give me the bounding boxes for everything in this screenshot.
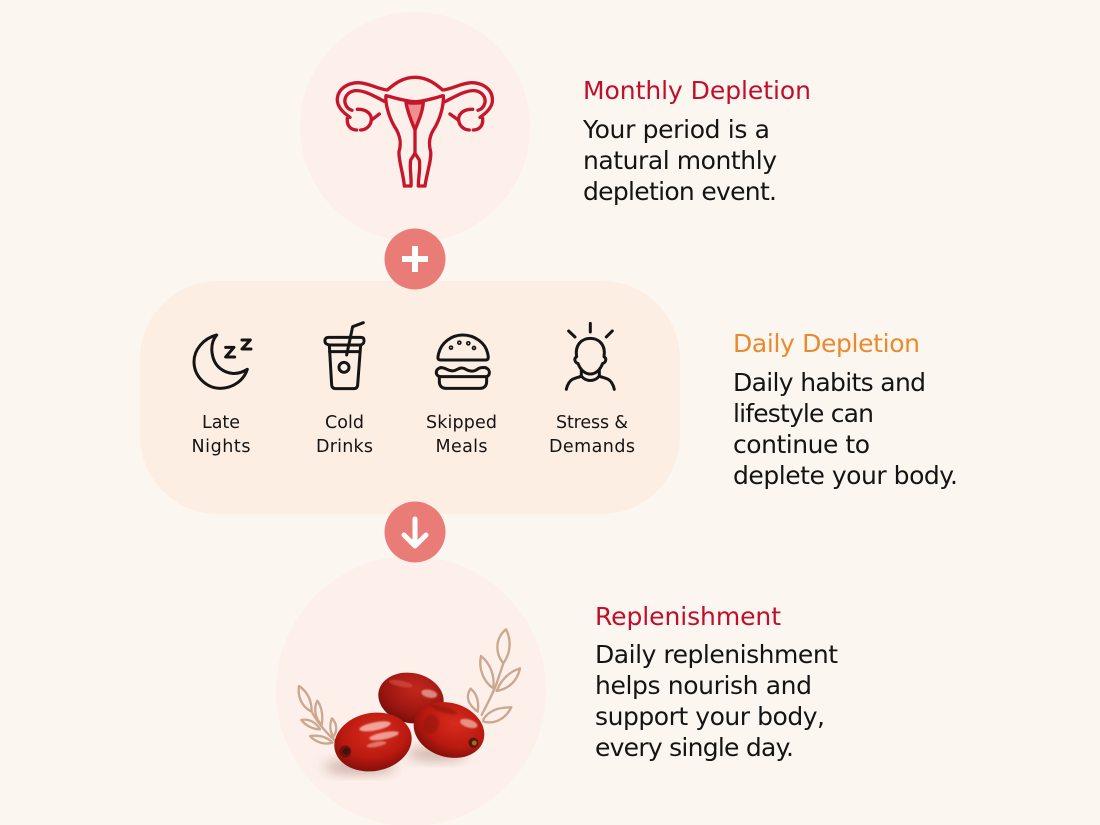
label: stress and demands: Demands (549, 437, 635, 457)
label: late nights (192, 413, 250, 457)
icon: burger (436, 335, 489, 388)
label: late nights: Nights (192, 437, 250, 457)
text block: daily depletion: lifestyle can (733, 399, 874, 428)
label: skipped meals: Skipped (426, 413, 497, 433)
icon: uterus (337, 77, 492, 186)
text block: monthly depletion: depletion event. (583, 177, 777, 206)
label: skipped meals: Meals (436, 437, 488, 457)
icon: down arrow badge (384, 502, 446, 562)
label: stress and demands: Stress & (556, 413, 628, 433)
text block: monthly depletion: natural monthly (583, 146, 777, 175)
icon: right leaf sprig (468, 629, 520, 722)
text block: monthly depletion (582, 115, 777, 206)
date: right (407, 694, 491, 766)
panel: replenishment circle (276, 556, 546, 825)
text block: daily depletion (733, 368, 958, 490)
illustration: jujube dates and leaves (299, 629, 520, 778)
text block: replenishment: helps nourish and (595, 671, 812, 700)
text block: daily depletion: deplete your body. (733, 461, 958, 490)
text block: replenishment: support your body, (595, 702, 825, 731)
label: stress and demands (549, 413, 635, 457)
text block: replenishment (595, 640, 838, 762)
date: front (329, 706, 417, 778)
text block: replenishment: Daily replenishment (595, 640, 838, 669)
text block: monthly depletion: Your period is a (582, 115, 770, 144)
text block: replenishment: every single day. (595, 733, 794, 762)
panel: daily depletion (140, 281, 680, 514)
text block: daily depletion: Daily habits and (733, 368, 926, 397)
label: cold drinks (316, 413, 373, 457)
heading: daily depletion: Daily Depletion (733, 329, 920, 358)
icon: left leaf sprig (299, 686, 336, 744)
shadow under right date (407, 748, 467, 760)
icon: cold drink (325, 323, 364, 389)
label: late nights: Late (202, 413, 240, 433)
heading: monthly depletion: Monthly Depletion (583, 76, 811, 105)
label: cold drinks: Drinks (316, 437, 373, 457)
heading: replenishment: Replenishment (595, 602, 781, 631)
icon: stressed person (566, 323, 614, 389)
label: skipped meals (426, 413, 497, 457)
date: back (374, 667, 448, 729)
icon: moon with z's (194, 335, 251, 388)
shadow under dates (324, 761, 396, 773)
panel: monthly depletion circle (300, 12, 530, 242)
icon: plus badge (384, 228, 446, 290)
text block: daily depletion: continue to (733, 430, 870, 459)
label: cold drinks: Cold (325, 413, 364, 433)
